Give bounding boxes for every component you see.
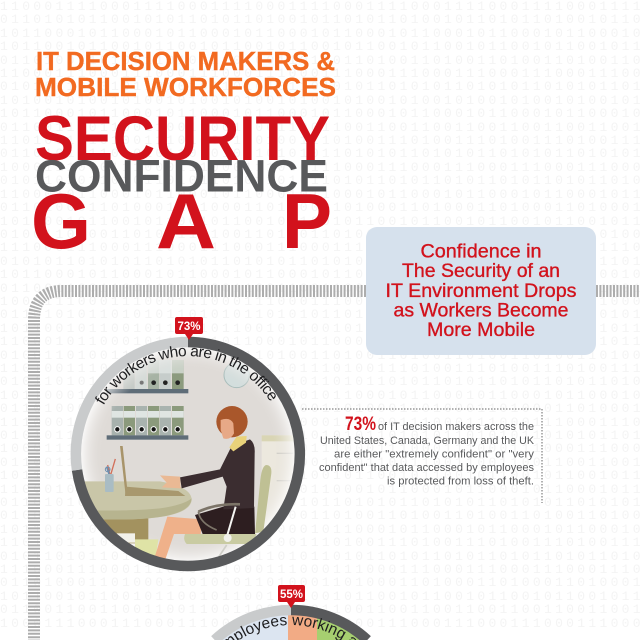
- text block: 73% explanation: is protected from loss of theft.: [387, 476, 534, 488]
- armrest: [198, 504, 240, 560]
- cabinet: [262, 435, 294, 508]
- donut ring: 55% segment: [291, 610, 367, 640]
- badge: 55%: 55%: [280, 589, 303, 601]
- callout: dotted leader: [302, 409, 542, 503]
- panel: confidence statement: The Security of an: [402, 260, 560, 282]
- illustration: partial scene: [223, 615, 360, 640]
- badge: 73%: [175, 317, 203, 340]
- wall: [81, 348, 292, 560]
- striped connector line: [34, 291, 640, 640]
- donut ring: 73% segment: [77, 342, 300, 566]
- pencil cup: [105, 459, 115, 492]
- text block: 73% explanation: of IT decision makers across the: [378, 421, 534, 433]
- clock: [224, 362, 249, 388]
- text block: 73% explanation: confident" that data accessed by employees: [319, 462, 534, 474]
- legs: [155, 517, 202, 559]
- text block: 73% explanation: United States, Canada, Germany and the UK: [320, 435, 535, 447]
- illustration: office worker: [81, 348, 294, 560]
- skirt: [195, 507, 255, 534]
- heading: gap: G: [31, 177, 91, 265]
- jacket: [180, 439, 255, 509]
- text block: 73% explanation: [319, 414, 535, 488]
- heading: gap: A: [156, 177, 216, 265]
- chart: remote workers donut: [211, 585, 371, 640]
- heading: security: SECURITY: [35, 104, 330, 174]
- title block: [31, 46, 336, 265]
- panel: confidence statement: [366, 227, 596, 355]
- lower shelf with binders: [107, 406, 188, 440]
- head: [216, 406, 248, 439]
- badge: 55%: [278, 585, 305, 608]
- chair back: [255, 465, 271, 533]
- papers and floor items: [116, 533, 158, 556]
- edge glow: [81, 347, 296, 562]
- panel: confidence statement: More Mobile: [427, 319, 535, 341]
- donut ring: remainder: [215, 610, 291, 640]
- text block: 73% explanation: are either "extremely confident" or "very: [334, 448, 535, 460]
- badge: 73%: 73%: [177, 321, 201, 333]
- hand: [160, 475, 181, 488]
- donut ring: remainder: [76, 342, 188, 470]
- subtitle: IT decision makers and mobile workforces: MOBILE WORKFORCES: [35, 72, 336, 102]
- collar: [229, 436, 247, 451]
- subtitle: IT decision makers and mobile workforces: [35, 46, 336, 102]
- text block: 73% explanation: 73%: [345, 414, 376, 435]
- panel: confidence statement: as Workers Become: [394, 300, 568, 322]
- heading: gap: P: [282, 177, 332, 265]
- desk: [73, 481, 192, 543]
- upper shelf with binders: [107, 360, 188, 393]
- chart: office workers donut with illustration: [70, 317, 306, 572]
- curved label: for workers in the office: for workers who are in the office: [95, 346, 276, 404]
- subtitle: IT decision makers and mobile workforces: IT DECISION MAKERS &: [36, 46, 335, 76]
- panel: confidence statement: IT Environment Drops: [386, 280, 577, 302]
- heading: gap: [31, 177, 332, 265]
- panel: confidence statement: Confidence in: [420, 240, 542, 262]
- heading: confidence: CONFIDENCE: [35, 150, 328, 202]
- chair seat: [184, 534, 257, 544]
- laptop: [120, 446, 185, 496]
